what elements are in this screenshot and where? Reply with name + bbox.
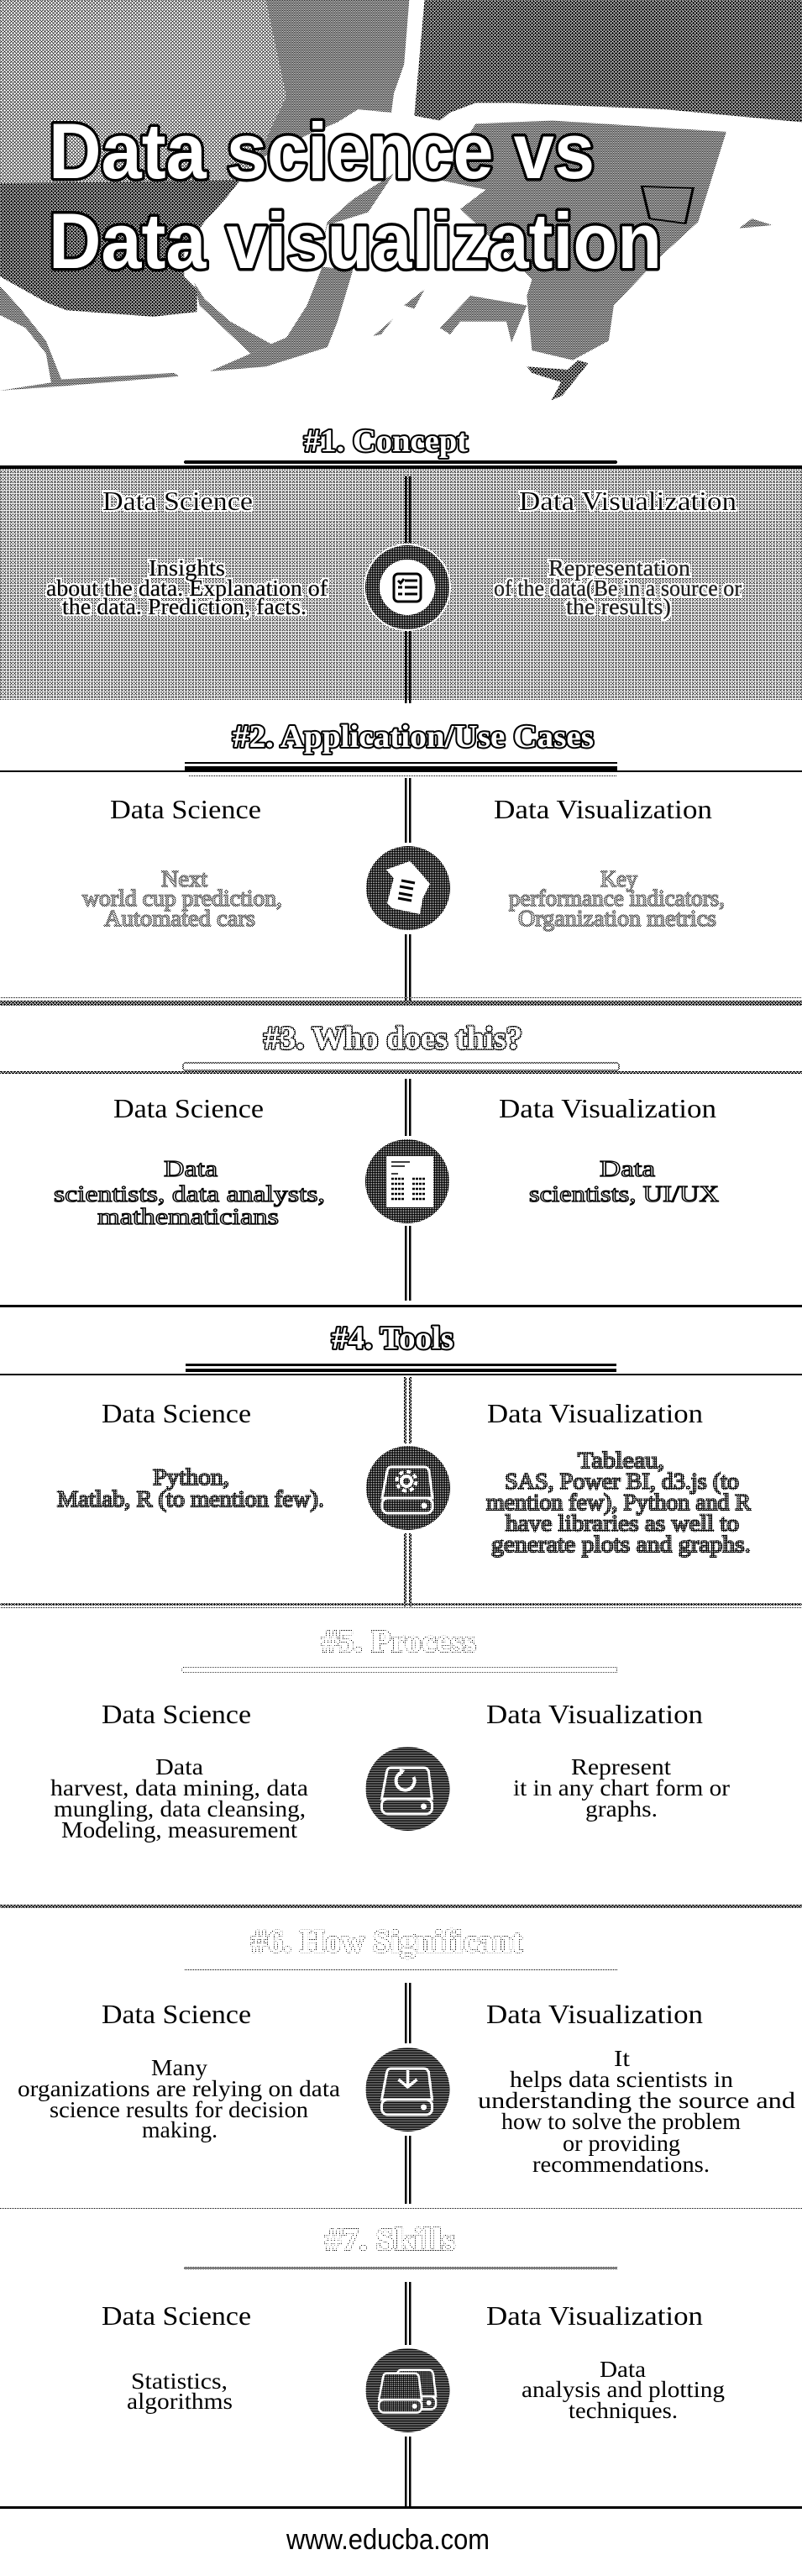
body: data science: world cup prediction, bbox=[82, 886, 282, 911]
section 6: how significant bbox=[0, 1924, 802, 2209]
icon: two drives bbox=[366, 2348, 450, 2432]
body: data visualization: recommendations. bbox=[532, 2152, 710, 2177]
body: data visualization: have libraries as well to bbox=[506, 1511, 739, 1536]
heading rule 6 bbox=[185, 1969, 617, 1970]
heading rule 5 bbox=[182, 1667, 617, 1673]
hero: laptop bracket bbox=[440, 296, 527, 343]
body: data visualization: Representation bbox=[548, 555, 691, 581]
body: data science: Data bbox=[164, 1156, 218, 1181]
body: data visualization bbox=[494, 555, 742, 619]
body: data visualization: the results) bbox=[566, 594, 671, 619]
heading 7: #7. Skills bbox=[325, 2222, 455, 2258]
icon: drive with download arrow bbox=[366, 2048, 450, 2132]
heading rule 1 bbox=[0, 460, 802, 469]
body: data science: mungling, data cleansing, bbox=[54, 1796, 306, 1822]
body: data science: mathematicians bbox=[97, 1204, 279, 1229]
title: Data visualization bbox=[49, 197, 662, 285]
body: data visualization: SAS, Power BI, d3.js (to bbox=[505, 1469, 739, 1494]
body: data science: Python, bbox=[153, 1464, 229, 1490]
column title: data visualization: Data Visualization bbox=[487, 1398, 703, 1428]
icon: drive with gear bbox=[366, 1446, 450, 1530]
body: data science: Statistics, bbox=[131, 2368, 228, 2394]
centre divider bbox=[405, 778, 411, 1001]
hero: laptop body bbox=[440, 120, 726, 360]
section 4: tools bbox=[0, 1321, 802, 1608]
section 5: process bbox=[0, 1624, 802, 1908]
body: data science: about the data. Explanation of bbox=[46, 576, 328, 601]
footer url: www.educba.com bbox=[286, 2524, 490, 2556]
heading 3: #3. Who does this? bbox=[264, 1021, 522, 1056]
body: data visualization: of the data(Be in a source or bbox=[494, 576, 742, 601]
icon: documents bbox=[366, 846, 450, 930]
body: data visualization bbox=[522, 2357, 725, 2423]
section 1: concept bbox=[0, 423, 802, 703]
heading 2: #2. Application/Use Cases bbox=[233, 719, 594, 754]
body: data visualization: analysis and plotting bbox=[522, 2377, 725, 2402]
centre divider bbox=[405, 1079, 411, 1301]
body: data science: harvest, data mining, data bbox=[50, 1775, 308, 1801]
body: data science: Automated cars bbox=[104, 906, 255, 931]
title bbox=[49, 107, 662, 285]
section 7: skills bbox=[0, 2222, 802, 2509]
heading 5: #5. Process bbox=[322, 1624, 476, 1659]
hero: slivers bbox=[374, 218, 773, 336]
heading rule 7 bbox=[184, 2267, 617, 2269]
hero: white box on laptop bbox=[642, 187, 693, 223]
body: data science bbox=[18, 2055, 340, 2142]
hero photo background bbox=[0, 0, 802, 400]
body: data science bbox=[50, 1754, 308, 1843]
body: data science: algorithms bbox=[127, 2389, 233, 2414]
body: data visualization: or providing bbox=[563, 2131, 680, 2156]
body: data science: Matlab, R (to mention few). bbox=[57, 1486, 324, 1511]
column title: data visualization: Data Visualization bbox=[486, 2300, 703, 2331]
column title: data visualization: Data Visualization bbox=[494, 794, 712, 824]
body: data visualization: Data bbox=[600, 1156, 655, 1181]
column title: data science: Data Science bbox=[113, 1093, 264, 1123]
title: Data science vs bbox=[49, 107, 595, 195]
heading rule 4 bbox=[0, 1364, 802, 1375]
icon: drive with refresh arrow bbox=[366, 1747, 450, 1831]
section bottom rule bbox=[0, 2208, 802, 2209]
column title: data visualization: Data Visualization bbox=[499, 1093, 716, 1123]
body: data science: Modeling, measurement bbox=[61, 1817, 298, 1843]
body: data visualization: Represent bbox=[571, 1754, 672, 1780]
hero: left desk area bbox=[0, 0, 409, 183]
body: data visualization: Key bbox=[600, 866, 637, 891]
body: data visualization: how to solve the problem bbox=[501, 2109, 741, 2134]
body: data visualization: Tableau, bbox=[578, 1448, 664, 1473]
body: data science: the data. Prediction, facts. bbox=[62, 594, 307, 619]
body: data visualization: understanding the source and bbox=[478, 2088, 796, 2113]
hero: top right dark panel bbox=[414, 0, 802, 122]
body: data visualization: techniques. bbox=[569, 2398, 678, 2423]
column title: data science: Data Science bbox=[110, 794, 261, 824]
section bottom rule bbox=[0, 1305, 802, 1307]
section 3: who does this bbox=[0, 1021, 802, 1307]
hero: chair base bbox=[210, 267, 353, 371]
centre divider bbox=[405, 476, 411, 703]
body: data science bbox=[54, 1156, 325, 1229]
body: data science bbox=[127, 2368, 233, 2414]
body: data visualization: It bbox=[614, 2046, 631, 2071]
body: data visualization: graphs. bbox=[585, 1796, 658, 1822]
page bottom rule bbox=[0, 2506, 802, 2509]
panel background bbox=[0, 469, 802, 700]
body: data visualization bbox=[513, 1754, 730, 1822]
hero: lower left dark area bbox=[0, 180, 240, 317]
hero: dark shards bbox=[527, 360, 588, 400]
body: data science: Data bbox=[155, 1754, 203, 1780]
body: data visualization bbox=[486, 1448, 751, 1557]
section bottom rules bbox=[0, 997, 802, 1006]
body: data visualization: mention few), Python and R bbox=[486, 1490, 751, 1515]
heading 6: #6. How Significant bbox=[251, 1924, 522, 1959]
body: data visualization: generate plots and graphs. bbox=[491, 1532, 751, 1557]
body: data science: Many bbox=[151, 2055, 208, 2080]
section 2: application and use cases bbox=[0, 719, 802, 1006]
body: data science: making. bbox=[142, 2117, 218, 2142]
column title: data science: Data Science bbox=[102, 1398, 251, 1428]
icon: report sheet bbox=[365, 1139, 449, 1223]
column title: data visualization: Data Visualization bbox=[486, 1999, 703, 2029]
column title: data visualization: Data Visualization bbox=[486, 1699, 703, 1729]
body: data science bbox=[82, 866, 282, 931]
column title: data science: Data Science bbox=[102, 1999, 251, 2029]
body: data science bbox=[46, 555, 328, 619]
body: data science bbox=[57, 1464, 324, 1511]
heading rule 2 bbox=[0, 762, 802, 776]
hero: chair arm bbox=[317, 174, 394, 267]
hero: chair strut bbox=[194, 283, 271, 354]
column title: data science: Data Science bbox=[102, 2300, 251, 2331]
body: data science: scientists, data analysts, bbox=[54, 1181, 325, 1207]
section bottom rule bbox=[0, 1905, 802, 1908]
body: data visualization: performance indicators, bbox=[509, 886, 725, 911]
column title: data visualization: Data Visualization bbox=[519, 486, 736, 516]
body: data science: Insights bbox=[149, 555, 225, 581]
body: data visualization bbox=[478, 2046, 796, 2177]
body: data visualization bbox=[529, 1156, 720, 1207]
centre divider bbox=[404, 1377, 411, 1606]
icon: checklist bbox=[364, 544, 451, 631]
body: data visualization: Data bbox=[600, 2357, 646, 2382]
hero: left leg bbox=[0, 287, 179, 391]
body: data visualization: helps data scientists in bbox=[510, 2067, 734, 2092]
body: data science: Next bbox=[161, 866, 208, 891]
column title: data science: Data Science bbox=[102, 1699, 251, 1729]
heading 4: #4. Tools bbox=[332, 1321, 453, 1356]
body: data visualization: it in any chart form or bbox=[513, 1775, 730, 1801]
body: data visualization: scientists, UI/UX bbox=[529, 1181, 720, 1207]
body: data science: science results for decision bbox=[50, 2097, 309, 2122]
centre divider bbox=[405, 2282, 411, 2506]
centre divider bbox=[405, 1983, 411, 2204]
hero: darker upper left shading bbox=[256, 0, 409, 160]
body: data visualization: Organization metrics bbox=[518, 906, 716, 931]
heading 1: #1. Concept bbox=[304, 423, 468, 459]
body: data science: organizations are relying on data bbox=[18, 2076, 340, 2101]
body: data visualization bbox=[509, 866, 725, 931]
heading rule 3 bbox=[0, 1063, 802, 1074]
column title: data science: Data Science bbox=[102, 486, 253, 516]
section bottom rules bbox=[0, 1603, 802, 1608]
